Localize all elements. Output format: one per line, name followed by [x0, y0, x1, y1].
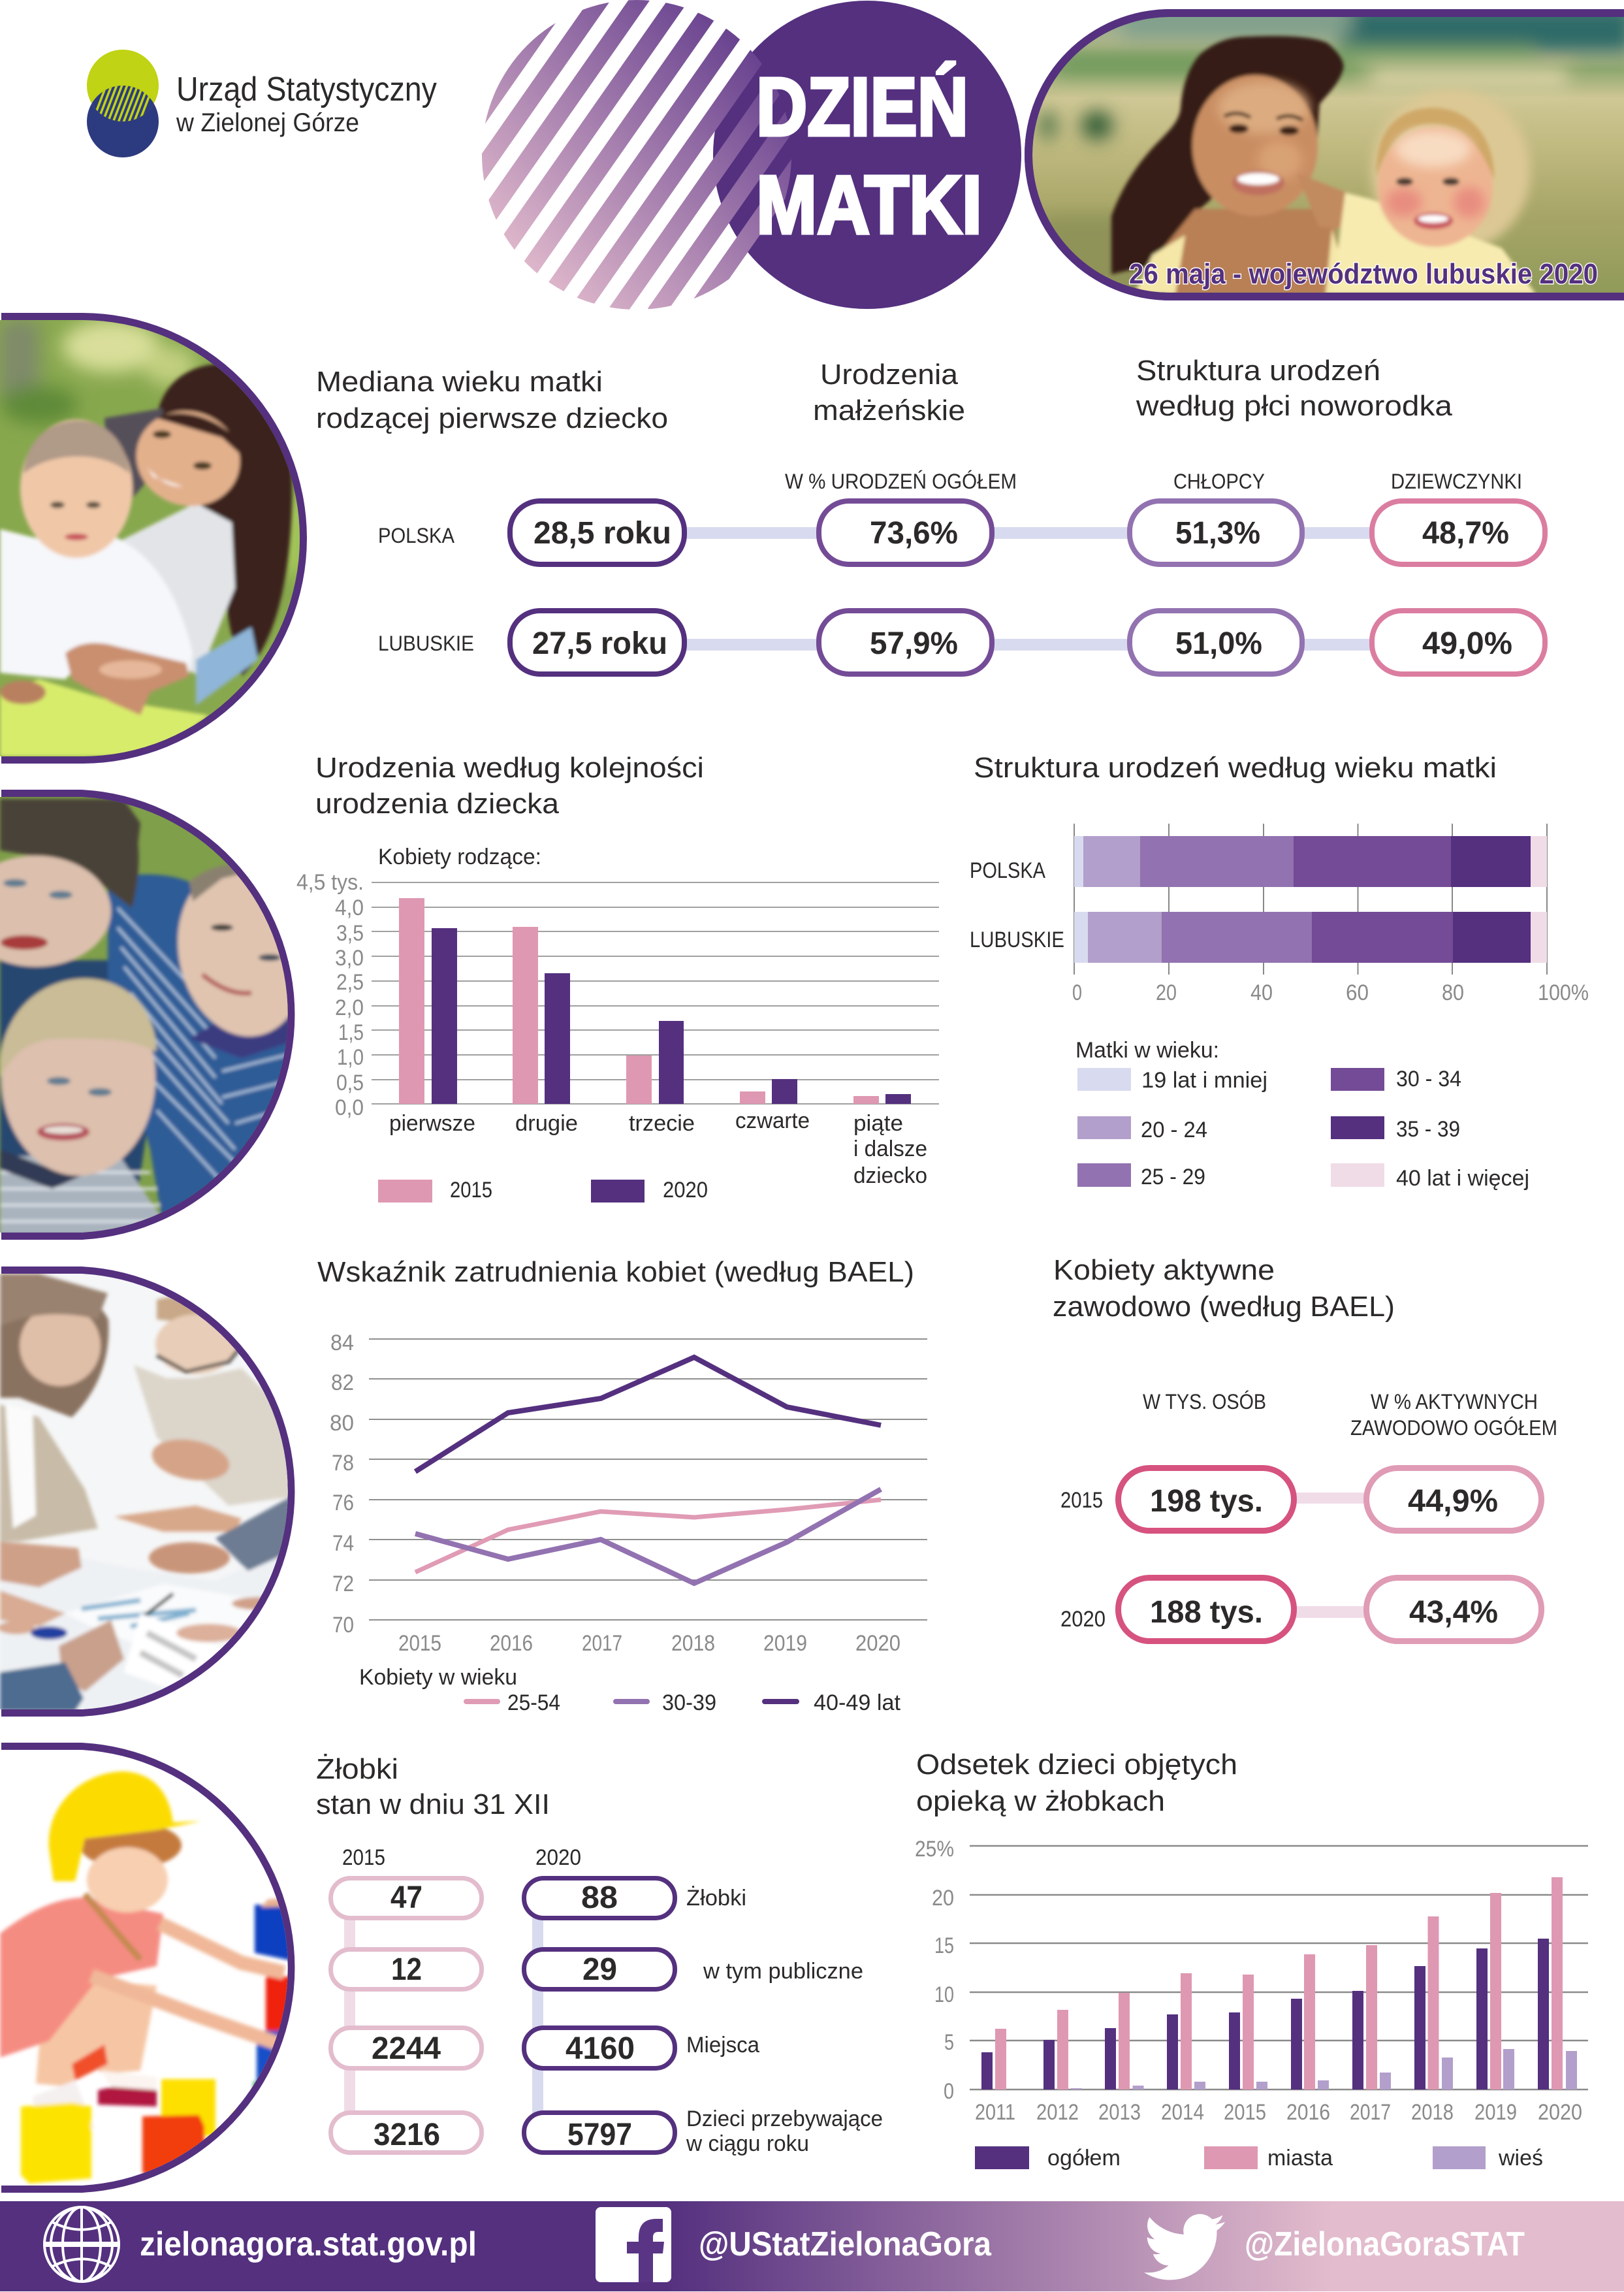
section: mediana wieku, urodzenia, struktura płci: 49,0%	[1422, 626, 1512, 661]
section: mediana wieku, urodzenia, struktura płci: POLSKA	[378, 524, 455, 547]
chart: odsetek dzieci objętych opieką w żłobkach	[915, 1749, 1588, 2171]
section: żłobki: 4160	[565, 2031, 635, 2066]
section: żłobki	[316, 1753, 883, 2156]
chart: urodzenia według kolejności: 0,0	[335, 1095, 364, 1120]
icon: globe	[44, 2207, 119, 2282]
chart: odsetek dzieci objętych opieką w żłobkach: 2018	[1411, 2100, 1454, 2125]
section: żłobki: 3216	[374, 2118, 440, 2152]
section: mediana wieku, urodzenia, struktura płci: 48,7%	[1422, 516, 1509, 551]
section: mediana wieku, urodzenia, struktura płci: 73,6%	[870, 516, 958, 551]
chart: urodzenia według kolejności: 2,5	[336, 970, 364, 995]
chart: odsetek dzieci objętych opieką w żłobkach: 20	[932, 1886, 954, 1911]
section: kobiety aktywne zawodowo: 198 tys.	[1150, 1484, 1263, 1519]
girl hair glow	[1371, 89, 1531, 253]
chart: urodzenia według kolejności: 4,5 tys.	[296, 870, 364, 895]
chart: struktura urodzeń według wieku matki: 0	[1072, 980, 1082, 1005]
chart: odsetek dzieci objętych opieką w żłobkach: 0	[944, 2079, 954, 2104]
chart: wskaźnik zatrudnienia kobiet: 74	[332, 1531, 354, 1556]
section: kobiety aktywne zawodowo	[1053, 1254, 1557, 1641]
chart: struktura urodzeń według wieku matki: Matki w wieku:	[1075, 1038, 1219, 1063]
section: mediana wieku, urodzenia, struktura płci: DZIEWCZYNKI	[1391, 470, 1522, 493]
girl	[1303, 178, 1346, 229]
footer band	[0, 2201, 1624, 2291]
photo panel: women at work	[0, 1267, 313, 1718]
chart: urodzenia według kolejności: 1,0	[337, 1045, 364, 1070]
chart: struktura urodzeń według wieku matki: 80	[1442, 980, 1464, 1005]
chart: odsetek dzieci objętych opieką w żłobkach: 5	[944, 2030, 954, 2055]
chart: struktura urodzeń według wieku matki: Struktura urodzeń według wieku matki	[974, 752, 1497, 784]
section: żłobki: w ciągu roku	[686, 2131, 809, 2156]
chart: struktura urodzeń według wieku matki: 35 - 39	[1396, 1117, 1460, 1142]
chart: urodzenia według kolejności: czwarte	[735, 1108, 810, 1133]
photo panel: three boys	[0, 790, 321, 1241]
section: żłobki: 47	[390, 1880, 422, 1915]
section: kobiety aktywne zawodowo: 2015	[1060, 1488, 1103, 1513]
section: kobiety aktywne zawodowo: 44,9%	[1408, 1484, 1498, 1519]
section: mediana wieku, urodzenia, struktura płci: 51,3%	[1175, 516, 1260, 551]
section: kobiety aktywne zawodowo: Kobiety aktywne	[1053, 1254, 1275, 1286]
chart: struktura urodzeń według wieku matki: 100%	[1538, 980, 1589, 1005]
chart: urodzenia według kolejności: drugie	[515, 1111, 578, 1136]
section: mediana wieku, urodzenia, struktura płci: Mediana wieku matki	[316, 366, 603, 398]
section: żłobki: 2015	[342, 1845, 385, 1870]
icon: twitter bird	[1144, 2214, 1225, 2280]
chart: wskaźnik zatrudnienia kobiet: 40-49 lat	[814, 1690, 901, 1715]
section: żłobki: 88	[581, 1880, 618, 1915]
chart: urodzenia według kolejności: 1,5	[338, 1020, 364, 1045]
section: mediana wieku, urodzenia, struktura płci: W % URODZEŃ OGÓŁEM	[785, 470, 1017, 493]
section: żłobki: stan w dniu 31 XII	[316, 1788, 550, 1820]
footer band: @ZielonaGoraSTAT	[1245, 2225, 1525, 2263]
chart: wskaźnik zatrudnienia kobiet: 2019	[763, 1631, 807, 1656]
chart: wskaźnik zatrudnienia kobiet: 2017	[582, 1631, 622, 1656]
chart: odsetek dzieci objętych opieką w żłobkach: 2020	[1538, 2100, 1582, 2125]
section: żłobki: 12	[391, 1952, 422, 1987]
chart: wskaźnik zatrudnienia kobiet: 72	[332, 1572, 354, 1596]
chart: struktura urodzeń według wieku matki: POLSKA	[970, 858, 1045, 883]
chart: odsetek dzieci objętych opieką w żłobkach: Odsetek dzieci objętych	[916, 1749, 1237, 1781]
chart: wskaźnik zatrudnienia kobiet: 76	[332, 1491, 354, 1515]
photo panel: mother with baby	[0, 313, 313, 764]
section: mediana wieku, urodzenia, struktura płci: Urodzenia	[820, 359, 959, 391]
chart: wskaźnik zatrudnienia kobiet: 70	[332, 1613, 354, 1638]
section: mediana wieku, urodzenia, struktura płci: 27,5 roku	[532, 626, 667, 661]
section: kobiety aktywne zawodowo: W TYS. OSÓB	[1143, 1390, 1266, 1413]
chart: wskaźnik zatrudnienia kobiet: 84	[330, 1331, 354, 1355]
chart: urodzenia według kolejności: Urodzenia według kolejności	[315, 752, 704, 784]
header photo banner: mother and daughter	[1019, 7, 1624, 300]
chart: struktura urodzeń według wieku matki: 60	[1346, 980, 1369, 1005]
chart: urodzenia według kolejności: 2015	[450, 1178, 492, 1202]
chart: urodzenia według kolejności: trzecie	[629, 1111, 695, 1136]
section: mediana wieku, urodzenia, struktura płci: LUBUSKIE	[378, 632, 474, 655]
section: mediana wieku, urodzenia, struktura płci: 51,0%	[1175, 626, 1262, 661]
chart: struktura urodzeń według wieku matki	[970, 752, 1589, 1191]
chart: wskaźnik zatrudnienia kobiet: Kobiety w wieku	[359, 1665, 517, 1690]
chart: wskaźnik zatrudnienia kobiet: 25-54	[507, 1690, 560, 1715]
footer band: @UStatZielonaGora	[699, 2225, 992, 2263]
section: żłobki: Żłobki	[316, 1753, 398, 1785]
chart: wskaźnik zatrudnienia kobiet: 82	[331, 1370, 354, 1395]
chart: wskaźnik zatrudnienia kobiet: 30-39	[662, 1690, 716, 1715]
section: kobiety aktywne zawodowo: W % AKTYWNYCH	[1371, 1390, 1538, 1413]
photo panel: girl with blocks	[0, 1743, 313, 2195]
chart: struktura urodzeń według wieku matki: 20	[1156, 980, 1177, 1005]
chart: wskaźnik zatrudnienia kobiet: 78	[332, 1451, 354, 1476]
section: kobiety aktywne zawodowo: zawodowo (według BAEL)	[1053, 1291, 1395, 1323]
chart: odsetek dzieci objętych opieką w żłobkach: 2016	[1286, 2100, 1330, 2125]
chart: odsetek dzieci objętych opieką w żłobkach: 2013	[1098, 2100, 1141, 2125]
section: mediana wieku, urodzenia, struktura płci	[316, 355, 1545, 674]
chart: odsetek dzieci objętych opieką w żłobkach: ogółem	[1047, 2146, 1121, 2171]
chart: odsetek dzieci objętych opieką w żłobkach: 2012	[1036, 2100, 1079, 2125]
chart: odsetek dzieci objętych opieką w żłobkach: opieką w żłobkach	[916, 1785, 1165, 1817]
chart: wskaźnik zatrudnienia kobiet: 2015	[398, 1631, 441, 1656]
logo: Urząd Statystyczny w Zielonej Górze: Urząd Statystyczny	[176, 71, 437, 108]
chart: urodzenia według kolejności: urodzenia dziecka	[315, 788, 560, 820]
chart: struktura urodzeń według wieku matki: 40 lat i więcej	[1396, 1166, 1529, 1191]
section: kobiety aktywne zawodowo: ZAWODOWO OGÓŁEM	[1350, 1416, 1557, 1440]
footer band: zielonagora.stat.gov.pl	[140, 2225, 477, 2263]
chart: struktura urodzeń według wieku matki: 20 - 24	[1141, 1118, 1207, 1142]
section: żłobki: 5797	[567, 2118, 632, 2152]
chart: odsetek dzieci objętych opieką w żłobkach: miasta	[1267, 2146, 1333, 2171]
section: żłobki: Miejsca	[686, 2033, 759, 2058]
section: żłobki: Dzieci przebywające	[686, 2106, 883, 2131]
chart: odsetek dzieci objętych opieką w żłobkach: 10	[934, 1982, 954, 2007]
chart: odsetek dzieci objętych opieką w żłobkach: 2011	[975, 2100, 1015, 2125]
section: mediana wieku, urodzenia, struktura płci: Struktura urodzeń	[1136, 355, 1380, 387]
chart: struktura urodzeń według wieku matki: 30 - 34	[1396, 1067, 1461, 1091]
chart: urodzenia według kolejności: pierwsze	[389, 1111, 475, 1136]
title block: purple circle with stripes: MATKI	[756, 159, 982, 251]
chart: struktura urodzeń według wieku matki: 25 - 29	[1141, 1165, 1205, 1189]
title block: purple circle with stripes	[482, 0, 1021, 310]
section: żłobki: 2244	[372, 2031, 441, 2066]
chart: wskaźnik zatrudnienia kobiet: 2018	[671, 1631, 715, 1656]
section: mediana wieku, urodzenia, struktura płci: według płci noworodka	[1136, 390, 1453, 422]
chart: odsetek dzieci objętych opieką w żłobkach: wieś	[1498, 2146, 1543, 2171]
chart: odsetek dzieci objętych opieką w żłobkach: 2019	[1474, 2100, 1517, 2125]
chart: odsetek dzieci objętych opieką w żłobkach: 2014	[1161, 2100, 1204, 2125]
section: mediana wieku, urodzenia, struktura płci: 57,9%	[870, 626, 958, 661]
chart: urodzenia według kolejności: 4,0	[335, 896, 364, 920]
logo: Urząd Statystyczny w Zielonej Górze: w Zielonej Górze	[176, 108, 359, 137]
section: mediana wieku, urodzenia, struktura płci: CHŁOPCY	[1173, 470, 1265, 493]
section: mediana wieku, urodzenia, struktura płci: rodzącej pierwsze dziecko	[316, 402, 668, 434]
icon: facebook	[596, 2207, 671, 2282]
logo: Urząd Statystyczny w Zielonej Górze	[85, 50, 437, 157]
chart: odsetek dzieci objętych opieką w żłobkach: 25%	[915, 1837, 954, 1862]
chart: wskaźnik zatrudnienia kobiet: 2020	[855, 1631, 900, 1656]
section: żłobki: w tym publiczne	[703, 1959, 863, 1984]
chart: urodzenia według kolejności: 3,0	[335, 946, 364, 971]
woman	[1111, 36, 1344, 274]
chart: odsetek dzieci objętych opieką w żłobkach: 15	[934, 1933, 954, 1958]
chart: struktura urodzeń według wieku matki: 19 lat i mniej	[1141, 1068, 1267, 1093]
chart: urodzenia według kolejności: i dalsze	[853, 1137, 927, 1161]
section: kobiety aktywne zawodowo: 188 tys.	[1150, 1595, 1263, 1630]
section: żłobki: Żłobki	[686, 1886, 746, 1911]
section: mediana wieku, urodzenia, struktura płci: małżeńskie	[813, 395, 965, 427]
chart: urodzenia według kolejności: 0,5	[336, 1071, 364, 1095]
chart: urodzenia według kolejności: piąte	[853, 1111, 903, 1136]
chart: urodzenia według kolejności: 3,5	[336, 921, 364, 946]
chart: wskaźnik zatrudnienia kobiet: 80	[330, 1411, 354, 1436]
chart: urodzenia według kolejności: Kobiety rodzące:	[378, 845, 541, 869]
chart: wskaźnik zatrudnienia kobiet	[317, 1256, 927, 1715]
chart: urodzenia według kolejności: 2,0	[335, 995, 364, 1020]
chart: urodzenia według kolejności: dziecko	[853, 1163, 927, 1188]
section: żłobki: 29	[582, 1952, 617, 1987]
chart: struktura urodzeń według wieku matki: LUBUSKIE	[970, 928, 1064, 952]
section: kobiety aktywne zawodowo: 43,4%	[1409, 1595, 1498, 1630]
title block: purple circle with stripes: DZIEŃ	[756, 61, 968, 153]
chart: odsetek dzieci objętych opieką w żłobkach: 2017	[1350, 2100, 1391, 2125]
chart: wskaźnik zatrudnienia kobiet: 2016	[490, 1631, 533, 1656]
chart: wskaźnik zatrudnienia kobiet: Wskaźnik zatrudnienia kobiet (według BAEL)	[317, 1256, 914, 1288]
chart: urodzenia według kolejności	[296, 752, 939, 1202]
chart: odsetek dzieci objętych opieką w żłobkach: 2015	[1224, 2100, 1266, 2125]
chart: struktura urodzeń według wieku matki: 40	[1250, 980, 1273, 1005]
section: żłobki: 2020	[535, 1845, 581, 1870]
chart: urodzenia według kolejności: 2020	[663, 1178, 708, 1202]
section: kobiety aktywne zawodowo: 2020	[1060, 1607, 1106, 1632]
section: mediana wieku, urodzenia, struktura płci: 28,5 roku	[533, 516, 671, 551]
